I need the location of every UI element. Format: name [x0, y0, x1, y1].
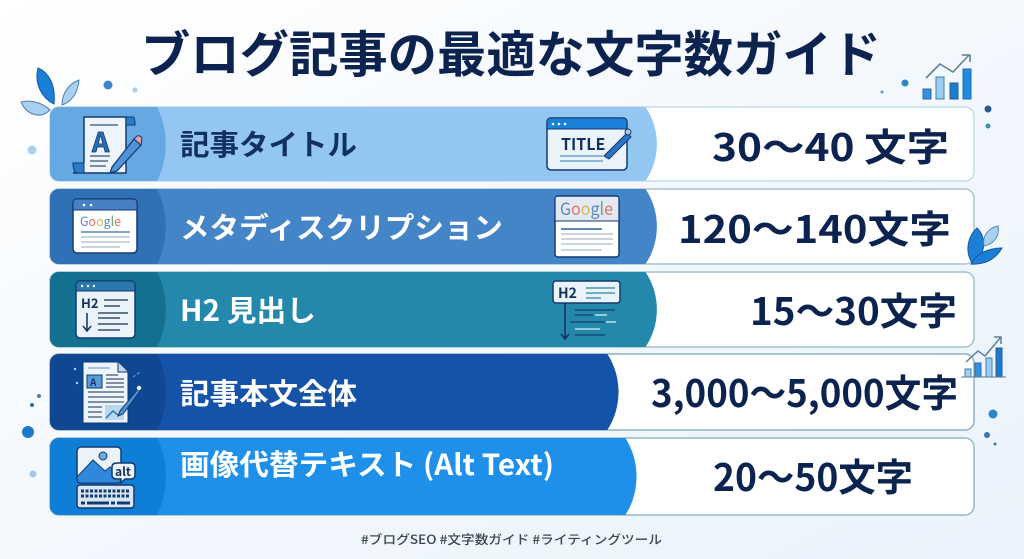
value: 120〜140文字	[678, 199, 951, 254]
decorative dots right	[880, 80, 998, 446]
icon: growth chart top right	[923, 55, 971, 99]
icon: H2 hierarchy	[553, 281, 620, 339]
hashtags: #ブログSEO #文字数ガイド #ライティングツール	[361, 529, 662, 548]
label: 画像代替テキスト (Alt Text)	[180, 442, 554, 484]
label: 記事タイトル	[180, 122, 357, 164]
icon: image alt keyboard	[77, 447, 135, 508]
icon: article document	[74, 362, 141, 423]
icon: H2 outline window: H2	[81, 293, 99, 312]
decorative dots left	[22, 80, 138, 478]
panel: 画像代替テキスト	[49, 437, 975, 516]
value: 3,000〜5,000文字	[651, 363, 958, 418]
icon: image alt keyboard: alt	[115, 463, 131, 480]
icon: google page: Google	[560, 195, 613, 220]
icon: H2 hierarchy: H2	[558, 283, 577, 303]
icon: title window: TITLE	[561, 131, 605, 155]
icon: document with pencil: A	[91, 121, 110, 160]
icon: document with pencil	[73, 117, 142, 173]
value: 30〜40 文字	[712, 117, 949, 172]
icon: title window	[547, 118, 631, 170]
icon: leaves right	[968, 226, 1002, 264]
label: H2 見出し	[180, 288, 316, 330]
label: 記事本文全体	[180, 371, 357, 413]
icon: H2 outline window	[76, 281, 135, 338]
panel: メタディスクリプション	[49, 188, 975, 265]
panel: 記事タイトル	[49, 106, 975, 182]
icon: google page	[555, 195, 619, 257]
icon: growth chart right	[961, 337, 1006, 377]
value: 15〜30文字	[750, 281, 957, 336]
title: ブログ記事の最適な文字数ガイド	[141, 16, 881, 87]
panel: 記事本文全体	[49, 353, 975, 431]
panel: H2 見出し	[49, 271, 975, 348]
label: メタディスクリプション	[180, 205, 503, 247]
icon: google window	[73, 199, 137, 253]
icon: article document: A	[89, 374, 97, 389]
icon: google window: Google	[80, 211, 121, 230]
icon: leaves top left	[21, 68, 79, 115]
value: 20〜50文字	[713, 447, 913, 502]
